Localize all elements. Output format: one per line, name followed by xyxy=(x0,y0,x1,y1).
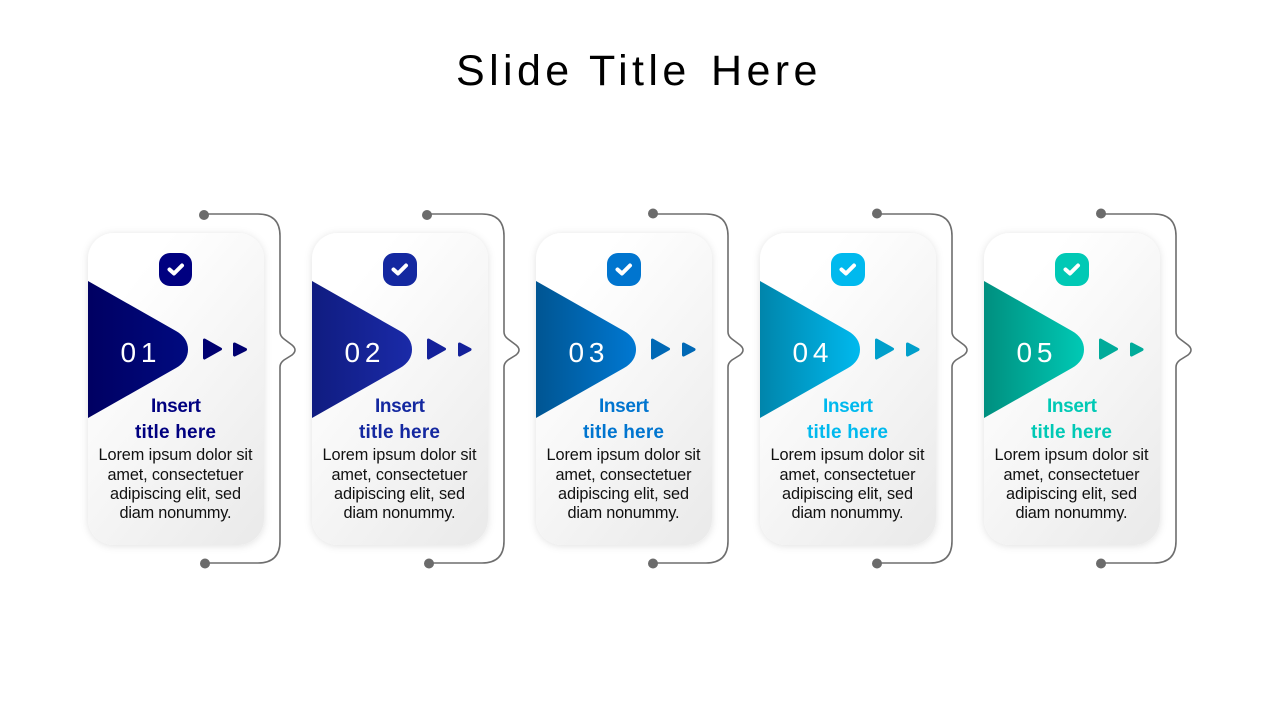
step text 05: amet, consectetuer xyxy=(1004,466,1140,484)
connector bracket 02 xyxy=(422,210,519,568)
arrows 02 xyxy=(428,340,470,358)
panel: step 01 xyxy=(88,210,295,568)
step title 05: title here xyxy=(1031,422,1112,443)
step text 03 xyxy=(546,446,701,522)
check icon 01 xyxy=(159,253,192,286)
connector bracket 05 xyxy=(1096,208,1191,568)
step text 04: Lorem ipsum dolor sit xyxy=(770,446,925,464)
card background 05 xyxy=(984,233,1160,545)
step title 02: title here xyxy=(359,422,440,443)
step title 03: Insert xyxy=(599,396,650,417)
check icon 04 xyxy=(831,253,865,286)
panel: step 04 xyxy=(760,208,967,568)
step text 04: diam nonummy. xyxy=(792,504,904,522)
check icon 05 xyxy=(1055,253,1089,286)
arrows 03 xyxy=(652,340,694,358)
arrows 04 xyxy=(876,340,918,358)
triangle with number 02: 02 xyxy=(344,337,380,368)
step text 05 xyxy=(994,446,1149,522)
step text 01: amet, consectetuer xyxy=(108,466,244,484)
title: Slide xyxy=(456,47,574,95)
step text 04: adipiscing elit, sed xyxy=(782,485,913,503)
triangle with number 03: 03 xyxy=(568,337,604,368)
triangle with number 04: 04 xyxy=(792,337,828,368)
step text 01: diam nonummy. xyxy=(120,504,232,522)
step title 04: title here xyxy=(807,422,888,443)
triangle with number 03 xyxy=(536,281,636,418)
step text 02: amet, consectetuer xyxy=(332,466,468,484)
step text 05: diam nonummy. xyxy=(1016,504,1128,522)
triangle with number 02 xyxy=(312,281,412,418)
step text 04: amet, consectetuer xyxy=(780,466,916,484)
connector bracket 04 xyxy=(872,208,967,568)
triangle with number 01: 01 xyxy=(120,337,156,368)
step text 03: adipiscing elit, sed xyxy=(558,485,689,503)
step text 02: adipiscing elit, sed xyxy=(334,485,465,503)
step text 05: adipiscing elit, sed xyxy=(1006,485,1137,503)
step title 01: title here xyxy=(135,422,216,443)
step title 02: Insert xyxy=(375,396,426,417)
card background 01 xyxy=(88,233,264,545)
step text 01: adipiscing elit, sed xyxy=(110,485,241,503)
title: Title xyxy=(589,47,691,95)
step text 03: diam nonummy. xyxy=(568,504,680,522)
step text 01: Lorem ipsum dolor sit xyxy=(98,446,253,464)
arrows 01 xyxy=(204,340,246,358)
step text 03: Lorem ipsum dolor sit xyxy=(546,446,701,464)
triangle with number 05 xyxy=(984,281,1084,418)
panel: step 05 xyxy=(984,208,1191,568)
card background 03 xyxy=(536,233,712,545)
check icon 02 xyxy=(383,253,417,286)
triangle with number 01 xyxy=(88,281,188,418)
panel: step 03 xyxy=(536,208,743,568)
arrows 05 xyxy=(1100,340,1142,358)
step text 04 xyxy=(770,446,925,522)
step title 04: Insert xyxy=(823,396,874,417)
step text 01 xyxy=(98,446,253,522)
connector bracket 01 xyxy=(199,210,295,568)
step text 03: amet, consectetuer xyxy=(556,466,692,484)
card background 04 xyxy=(760,233,936,545)
check icon 03 xyxy=(607,253,641,286)
triangle with number 04 xyxy=(760,281,860,418)
step text 02: Lorem ipsum dolor sit xyxy=(322,446,477,464)
title: Here xyxy=(711,47,822,95)
connector bracket 03 xyxy=(648,208,743,568)
step text 02 xyxy=(322,446,477,522)
step text 02: diam nonummy. xyxy=(344,504,456,522)
step title 05: Insert xyxy=(1047,396,1098,417)
step title 01: Insert xyxy=(151,396,202,417)
panel: step 02 xyxy=(312,210,519,568)
step title 03: title here xyxy=(583,422,664,443)
card background 02 xyxy=(312,233,488,545)
step text 05: Lorem ipsum dolor sit xyxy=(994,446,1149,464)
triangle with number 05: 05 xyxy=(1016,337,1052,368)
